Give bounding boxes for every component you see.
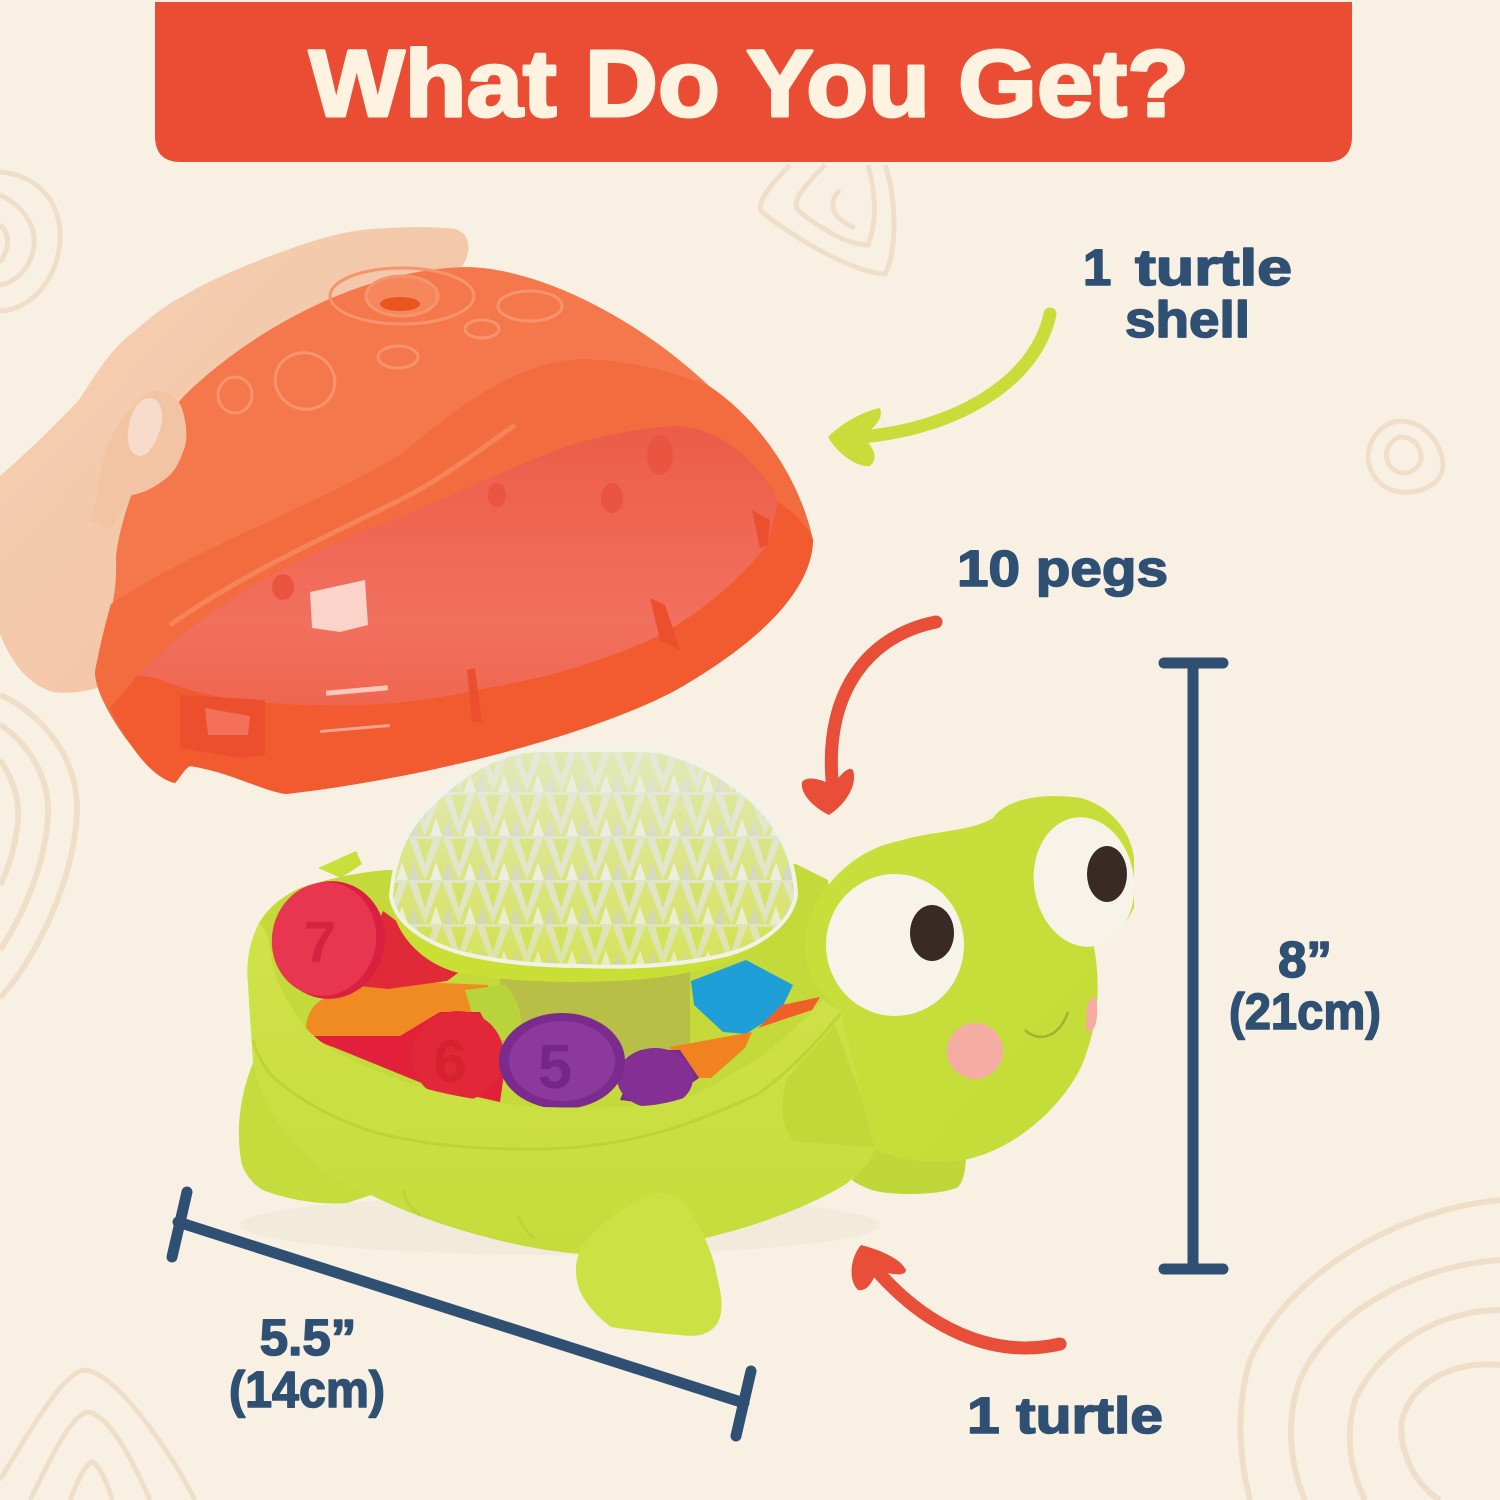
label: 1 turtle shell: 1 [1083,239,1111,296]
label: 5.5 in: 5.5” [260,1309,356,1366]
shell outer dome [95,267,813,794]
label: 1 turtle shell [1083,239,1292,348]
hand [0,227,468,720]
peg: 5 purple: 5 [538,1033,572,1102]
back foot [239,1063,371,1203]
peg: orange [306,981,500,1070]
inner rim floor [110,426,813,794]
body with rim [247,923,876,1254]
title: What Do You Get? [309,31,1189,137]
turtle [239,745,1143,1336]
peg: 7 [261,871,462,1009]
shell rim band [95,359,813,794]
label: 10 pegs: 10 pegs [957,540,1168,597]
title banner [155,2,1352,162]
peg: blue [691,960,793,1034]
interior highlights and details [310,580,368,632]
label: 5.5 in [229,1309,385,1418]
label: 1 turtle shell: shell [1125,291,1250,348]
rim lower edge [253,1012,842,1149]
arrow: turtle [852,1245,1060,1348]
light dome [389,752,798,969]
label: 1 turtle: 1 turtle [967,1387,1163,1444]
dome base plate [391,900,793,982]
neck [782,1025,880,1148]
label: 8 in: 8” [1278,931,1332,988]
back rim and bowl interior [259,864,840,1120]
peg: 6 red: 6 [433,1028,467,1095]
label: 8 in [1229,931,1381,1040]
arrow: pegs [802,622,936,815]
peg: 7: 7 [304,910,336,975]
pegs [261,871,820,1109]
soft ground shadow [240,1195,880,1255]
shell interior dome [138,426,778,705]
label: 1 turtle shell: turtle [1135,239,1292,296]
peg: green [465,985,521,1040]
thumb [90,391,186,530]
peg: 5 purple [499,1013,625,1109]
body ribs [403,1190,535,1238]
label: 8 in: (21cm) [1229,983,1381,1040]
interior latch and ribs [180,510,770,758]
rim highlight [170,425,515,625]
cheeks and smile [947,1023,1003,1079]
label: 5.5 in: (14cm) [229,1361,385,1418]
peg: 6 red [306,1011,506,1102]
peg: orange cone [670,1032,752,1078]
turtle shell, lifted [95,267,813,794]
front foot [576,1193,722,1336]
width dimension [172,1192,751,1436]
peg: orange right [758,997,820,1028]
eye right [1025,811,1143,953]
shell top details [218,268,562,418]
head [805,796,1134,1162]
arrow: turtle shell [828,314,1050,466]
far foot [852,1140,966,1194]
eye left [826,874,964,1016]
peg: purple small [617,1048,699,1108]
height dimension [1164,663,1223,1269]
